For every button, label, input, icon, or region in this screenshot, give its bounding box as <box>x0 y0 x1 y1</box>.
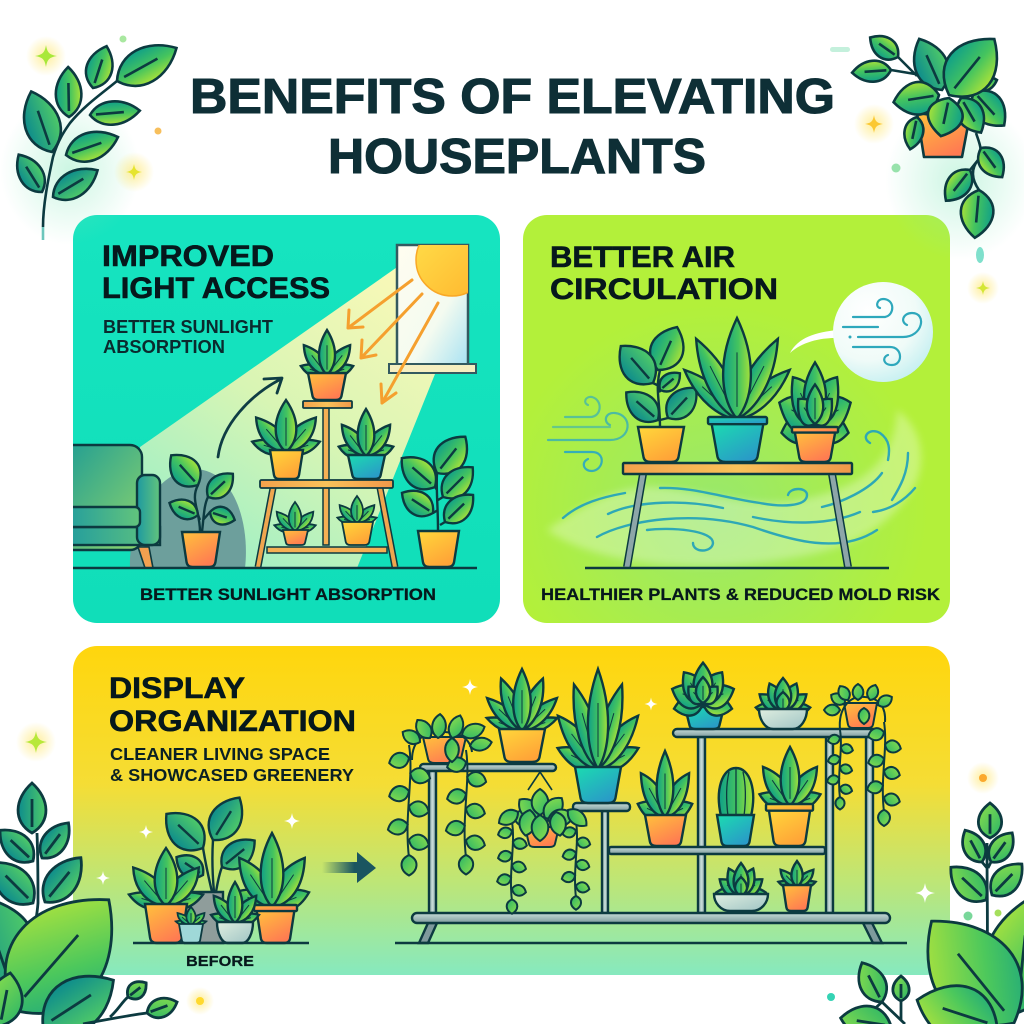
panel: better air circulation <box>523 215 950 623</box>
spike plant yellow rim pot <box>756 747 824 846</box>
spike plant orange pot mid shelf <box>635 751 695 846</box>
rack floor <box>395 942 907 944</box>
panel 1 heading <box>102 240 330 305</box>
air swoosh <box>547 410 921 566</box>
panel 2 heading: BETTER AIR <box>550 241 735 274</box>
small plant low pot <box>776 861 818 911</box>
title: HOUSEPLANTS <box>328 130 706 184</box>
panel 2 caption: HEALTHIER PLANTS & REDUCED MOLD RISK <box>541 585 941 604</box>
before: glass bowl plant <box>208 882 262 943</box>
panel: display organization <box>73 646 950 975</box>
table <box>623 463 852 567</box>
succulent low bowl <box>714 863 768 911</box>
spike plant on shelf <box>482 669 562 762</box>
panel 3 heading: ORGANIZATION <box>109 705 356 738</box>
plant: lower right of stand <box>335 496 379 545</box>
plant: yellow pot <box>609 320 705 462</box>
title <box>190 70 835 184</box>
sparkles in panel <box>96 679 935 903</box>
trailing plant right <box>824 683 902 826</box>
metal rack <box>412 729 890 943</box>
panel 1 heading: LIGHT ACCESS <box>102 272 330 305</box>
plant shadow <box>130 469 246 568</box>
panel 3 subheading: & SHOWCASED GREENERY <box>110 765 354 785</box>
cactus <box>717 768 754 846</box>
trailing plant left <box>386 713 493 876</box>
panel 1 heading: IMPROVED <box>102 240 274 273</box>
before: small teal pot <box>174 907 208 943</box>
panel 1 subheading <box>103 317 273 357</box>
corner decoration: top left sprig <box>0 33 185 245</box>
panel 1 subheading: ABSORPTION <box>103 337 225 357</box>
floor line <box>585 567 889 569</box>
plant: middle right of stand <box>336 409 396 479</box>
light beam <box>140 268 435 567</box>
floor line <box>73 567 477 569</box>
arrow: before to after <box>322 852 376 883</box>
panel 2 heading <box>550 241 778 306</box>
panel 3 heading <box>109 672 356 738</box>
plant: lower left of stand <box>272 502 318 545</box>
corner decoration: bottom right foliage <box>827 762 1024 1024</box>
plant: top of stand <box>298 330 356 400</box>
plant: orange pot <box>775 362 855 462</box>
sofa <box>73 444 162 567</box>
panel 1 subheading: BETTER SUNLIGHT <box>103 317 273 337</box>
plant: middle left of stand <box>248 400 324 479</box>
succulent bowl top shelf <box>755 678 811 729</box>
tall plant teal pot <box>552 669 644 803</box>
before: orange pot plant <box>231 833 313 943</box>
plant stand <box>258 401 395 567</box>
plant: floor right <box>393 427 482 567</box>
sunlight arrows <box>348 280 438 403</box>
before: tall plant in grey pot <box>155 790 263 943</box>
plant: teal pot <box>678 318 796 462</box>
hanging plant <box>496 772 591 914</box>
before label: BEFORE <box>186 953 254 970</box>
wind lines left <box>548 397 628 471</box>
rosette on top shelf <box>668 663 738 729</box>
corner decoration: bottom left foliage <box>0 722 214 1024</box>
panel 2 heading: CIRCULATION <box>550 273 778 306</box>
before floor <box>133 942 309 944</box>
panel 3 subheading <box>110 744 354 785</box>
panel 1 caption: BETTER SUNLIGHT ABSORPTION <box>140 585 436 604</box>
curved up arrow <box>218 378 282 457</box>
window with sun <box>388 244 477 374</box>
panel 3 heading: DISPLAY <box>109 672 245 705</box>
wind lines under table <box>563 431 915 550</box>
panel 3 subheading: CLEANER LIVING SPACE <box>110 744 330 764</box>
plant: floor left <box>161 446 240 567</box>
speech bubble with wind <box>790 282 933 382</box>
corner decoration: top right potted plant <box>830 24 1024 304</box>
title: BENEFITS OF ELEVATING <box>190 70 835 124</box>
panel: improved light access <box>60 215 500 623</box>
before: yellow pot plant <box>125 848 207 943</box>
